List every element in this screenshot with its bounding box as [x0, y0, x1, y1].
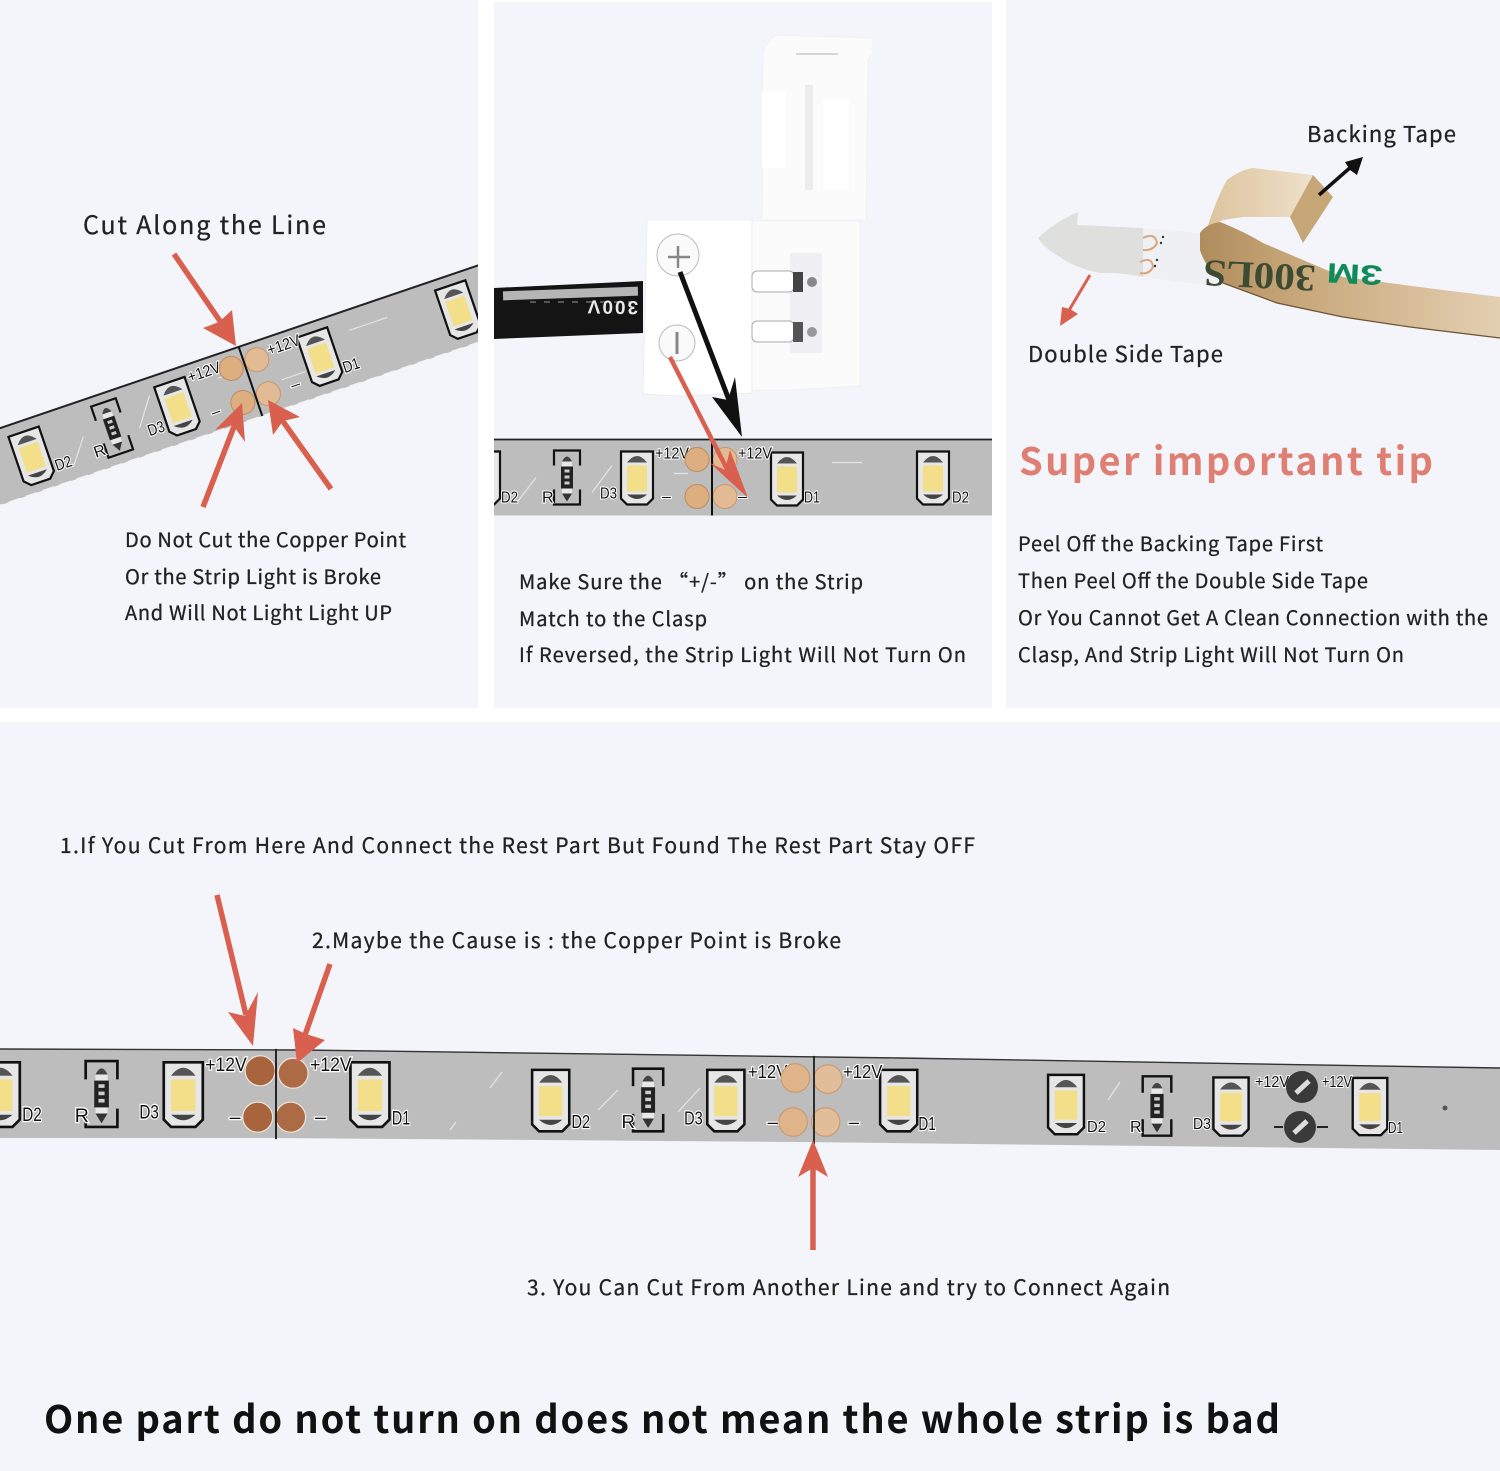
- angled LED strip: D2: [53, 453, 75, 475]
- label: double side tape: Double Side Tape: [1028, 337, 1223, 369]
- strip segment: broken copper points: –: [315, 1106, 326, 1128]
- arrow: broken copper point: [293, 964, 330, 1063]
- text: copper point warning: Do Not Cut the Copper Point: [125, 524, 406, 553]
- angled LED strip: D3: [146, 418, 167, 440]
- clasp connector: [643, 35, 873, 396]
- strip segment: good copper points: [532, 1056, 936, 1144]
- angled LED strip: D1: [341, 355, 362, 377]
- text: polarity instructions: Match to the Clasp: [519, 603, 707, 632]
- panel: match polarity to clasp: [468, 2, 992, 708]
- text: peeling instructions: [1018, 528, 1488, 668]
- strip segment: soldered points: D2: [1087, 1119, 1106, 1136]
- strip segment: broken copper points: R: [75, 1105, 89, 1127]
- arrow: cut location: [217, 895, 258, 1046]
- peeled tape photo: [1038, 168, 1500, 338]
- angled LED strip: [0, 264, 478, 504]
- strip segment: broken copper points: D3: [139, 1101, 159, 1123]
- text: copper point warning: Or the Strip Light is Broke: [125, 561, 381, 590]
- text: copper point warning: [125, 524, 406, 626]
- brown backing tape: 300LS: [1202, 251, 1316, 299]
- text: peeling instructions: Or You Cannot Get A Clean Connection with the: [1018, 602, 1488, 631]
- straight LED strip: R: [542, 490, 554, 506]
- straight LED strip: D2: [501, 490, 518, 506]
- strip segment: good copper points: D1: [918, 1113, 936, 1134]
- angled LED strip: –: [289, 376, 303, 395]
- brown backing tape: [1200, 222, 1500, 338]
- strip segment: good copper points: +12V: [843, 1061, 883, 1082]
- strip segment: good copper points: D3: [684, 1107, 703, 1128]
- black cable: [494, 281, 643, 339]
- straight LED strip: [468, 440, 992, 516]
- text: polarity instructions: [519, 566, 966, 668]
- strip segment: soldered points: +12V: [1322, 1074, 1352, 1091]
- text: peeling instructions: Then Peel Off the Double Side Tape: [1018, 565, 1368, 594]
- step 1 text: 1.If You Cut From Here And Connect the Rest Part But Found The Rest Part Stay OFF: [60, 830, 975, 860]
- strip segment: broken copper points: D2: [22, 1104, 42, 1126]
- strip segment: broken copper points: +12V: [205, 1054, 247, 1076]
- straight LED strip: D1: [804, 490, 820, 506]
- strip segment: good copper points: +12V: [748, 1061, 788, 1082]
- strip segment: good copper points: –: [849, 1111, 860, 1132]
- angled LED strip: +12V: [185, 359, 223, 386]
- strip segment: soldered points: D1: [1388, 1120, 1403, 1137]
- strip segment: soldered points: D3: [1193, 1116, 1211, 1133]
- panel: troubleshooting strip: [0, 722, 1500, 1471]
- straight LED strip: –: [738, 488, 747, 506]
- arrow: cut line: [174, 254, 236, 346]
- panel: cut along the line: [0, 0, 478, 708]
- text: copper point warning: And Will Not Light Light UP: [125, 597, 392, 626]
- strip segment: broken copper points: –: [230, 1106, 241, 1128]
- straight LED strip: –: [662, 488, 671, 506]
- text: peeling instructions: Peel Off the Backing Tape First: [1018, 528, 1323, 557]
- strip segment: good copper points: –: [768, 1111, 779, 1132]
- bottom conclusion heading: One part do not turn on does not mean the whole strip is bad: [44, 1389, 1280, 1444]
- step 2 text: 2.Maybe the Cause is : the Copper Point is Broke: [312, 925, 841, 955]
- heading: super important tip: Super important tip: [1019, 431, 1433, 486]
- white double side tape: [1038, 212, 1164, 277]
- arrow: red polarity: [670, 357, 748, 498]
- clasp base with screws: [643, 220, 752, 396]
- strip segment: soldered points: [1048, 1071, 1403, 1143]
- black cable: 300V: [586, 295, 638, 317]
- strip segment: soldered points: R: [1130, 1119, 1142, 1136]
- heading: cut along the line: Cut Along the Line: [83, 206, 326, 242]
- upper tape loop: [1207, 168, 1333, 243]
- straight LED strip: +12V: [655, 446, 689, 462]
- panel: super important tip: [1006, 0, 1500, 708]
- strip segment: good copper points: R: [621, 1111, 635, 1132]
- arrow: backing tape: [1319, 157, 1363, 195]
- strip segment: broken copper points: D1: [392, 1108, 410, 1130]
- clasp pins: [752, 271, 817, 342]
- arrow: double side tape: [1060, 275, 1090, 326]
- arrow: another cut line: [798, 1140, 828, 1250]
- straight LED strip: +12V: [738, 446, 772, 462]
- arrow: copper point left: [203, 403, 245, 507]
- angled LED strip: R: [92, 442, 108, 462]
- text: peeling instructions: Clasp, And Strip Light Will Not Turn On: [1018, 639, 1404, 668]
- text: polarity instructions: Make Sure the “+/-” on the Strip: [519, 566, 863, 595]
- strip segment: good copper points: D2: [572, 1111, 590, 1132]
- brown backing tape: 3M: [1326, 257, 1383, 291]
- strip segment: broken copper points: +12V: [310, 1054, 352, 1076]
- straight LED strip: D3: [600, 486, 617, 502]
- step 3 text: 3. You Can Cut From Another Line and try to Connect Again: [527, 1272, 1170, 1302]
- arrow: black polarity: [680, 272, 742, 437]
- angled LED strip: –: [209, 403, 223, 422]
- arrow: copper point right: [268, 400, 331, 489]
- strip segment: soldered points: +12V: [1255, 1074, 1289, 1091]
- strip segment: broken copper points: [0, 1049, 410, 1139]
- angled LED strip: +12V: [265, 332, 303, 359]
- label: backing tape: Backing Tape: [1307, 117, 1456, 149]
- straight LED strip: D2: [952, 490, 969, 506]
- long LED strip: [0, 1049, 1500, 1150]
- text: polarity instructions: If Reversed, the Strip Light Will Not Turn On: [519, 639, 966, 668]
